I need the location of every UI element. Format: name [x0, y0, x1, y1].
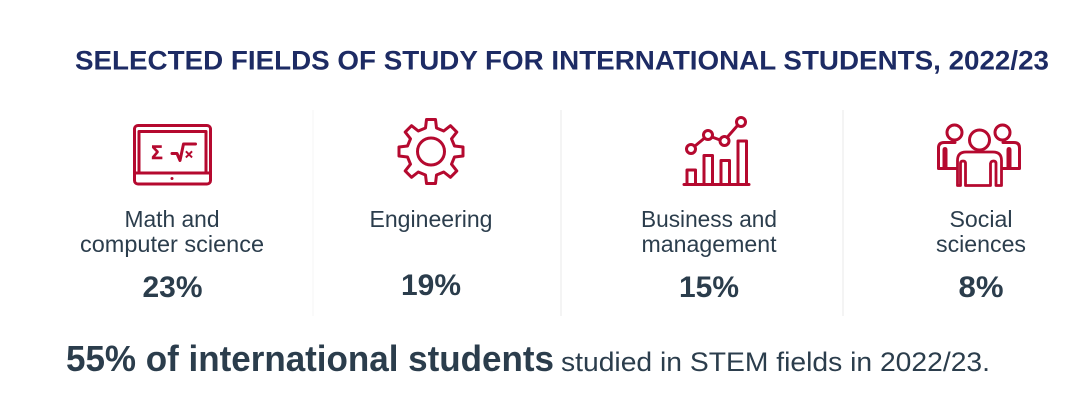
panel: engineering	[370, 120, 492, 302]
label: social sciences: Social	[950, 206, 1012, 232]
label: business and management: Business and	[641, 206, 777, 232]
panel: math and computer science	[80, 126, 264, 304]
callout: STEM statement: 55% of international students	[66, 338, 554, 379]
value: 23%: 23%	[142, 271, 202, 304]
label: social sciences: sciences	[936, 231, 1026, 257]
label: math and computer science: computer science	[80, 231, 264, 257]
label: engineering: Engineering	[370, 206, 492, 232]
title: SELECTED FIELDS OF STUDY FOR INTERNATIONAL STUDENTS, 2022/23	[75, 46, 1049, 76]
label: math and computer science: Math and	[124, 206, 220, 232]
label: business and management: management	[642, 231, 777, 257]
value: 19%: 19%	[401, 269, 461, 302]
icon: bar and line chart	[684, 118, 749, 184]
icon: group of people	[938, 125, 1020, 186]
icon: gear	[399, 120, 463, 184]
icon: laptop with math symbols: ×	[185, 146, 193, 162]
value: 15%: 15%	[679, 271, 739, 304]
icon: laptop with math symbols: Σ	[151, 143, 163, 164]
callout: STEM statement: studied in STEM fields in 2022/23.	[561, 347, 990, 377]
icon: laptop with math symbols	[134, 126, 210, 184]
panel: business and management	[641, 118, 777, 304]
panel: social sciences	[936, 125, 1026, 304]
value: 8%: 8%	[958, 271, 1004, 304]
callout: STEM statement	[66, 338, 990, 379]
